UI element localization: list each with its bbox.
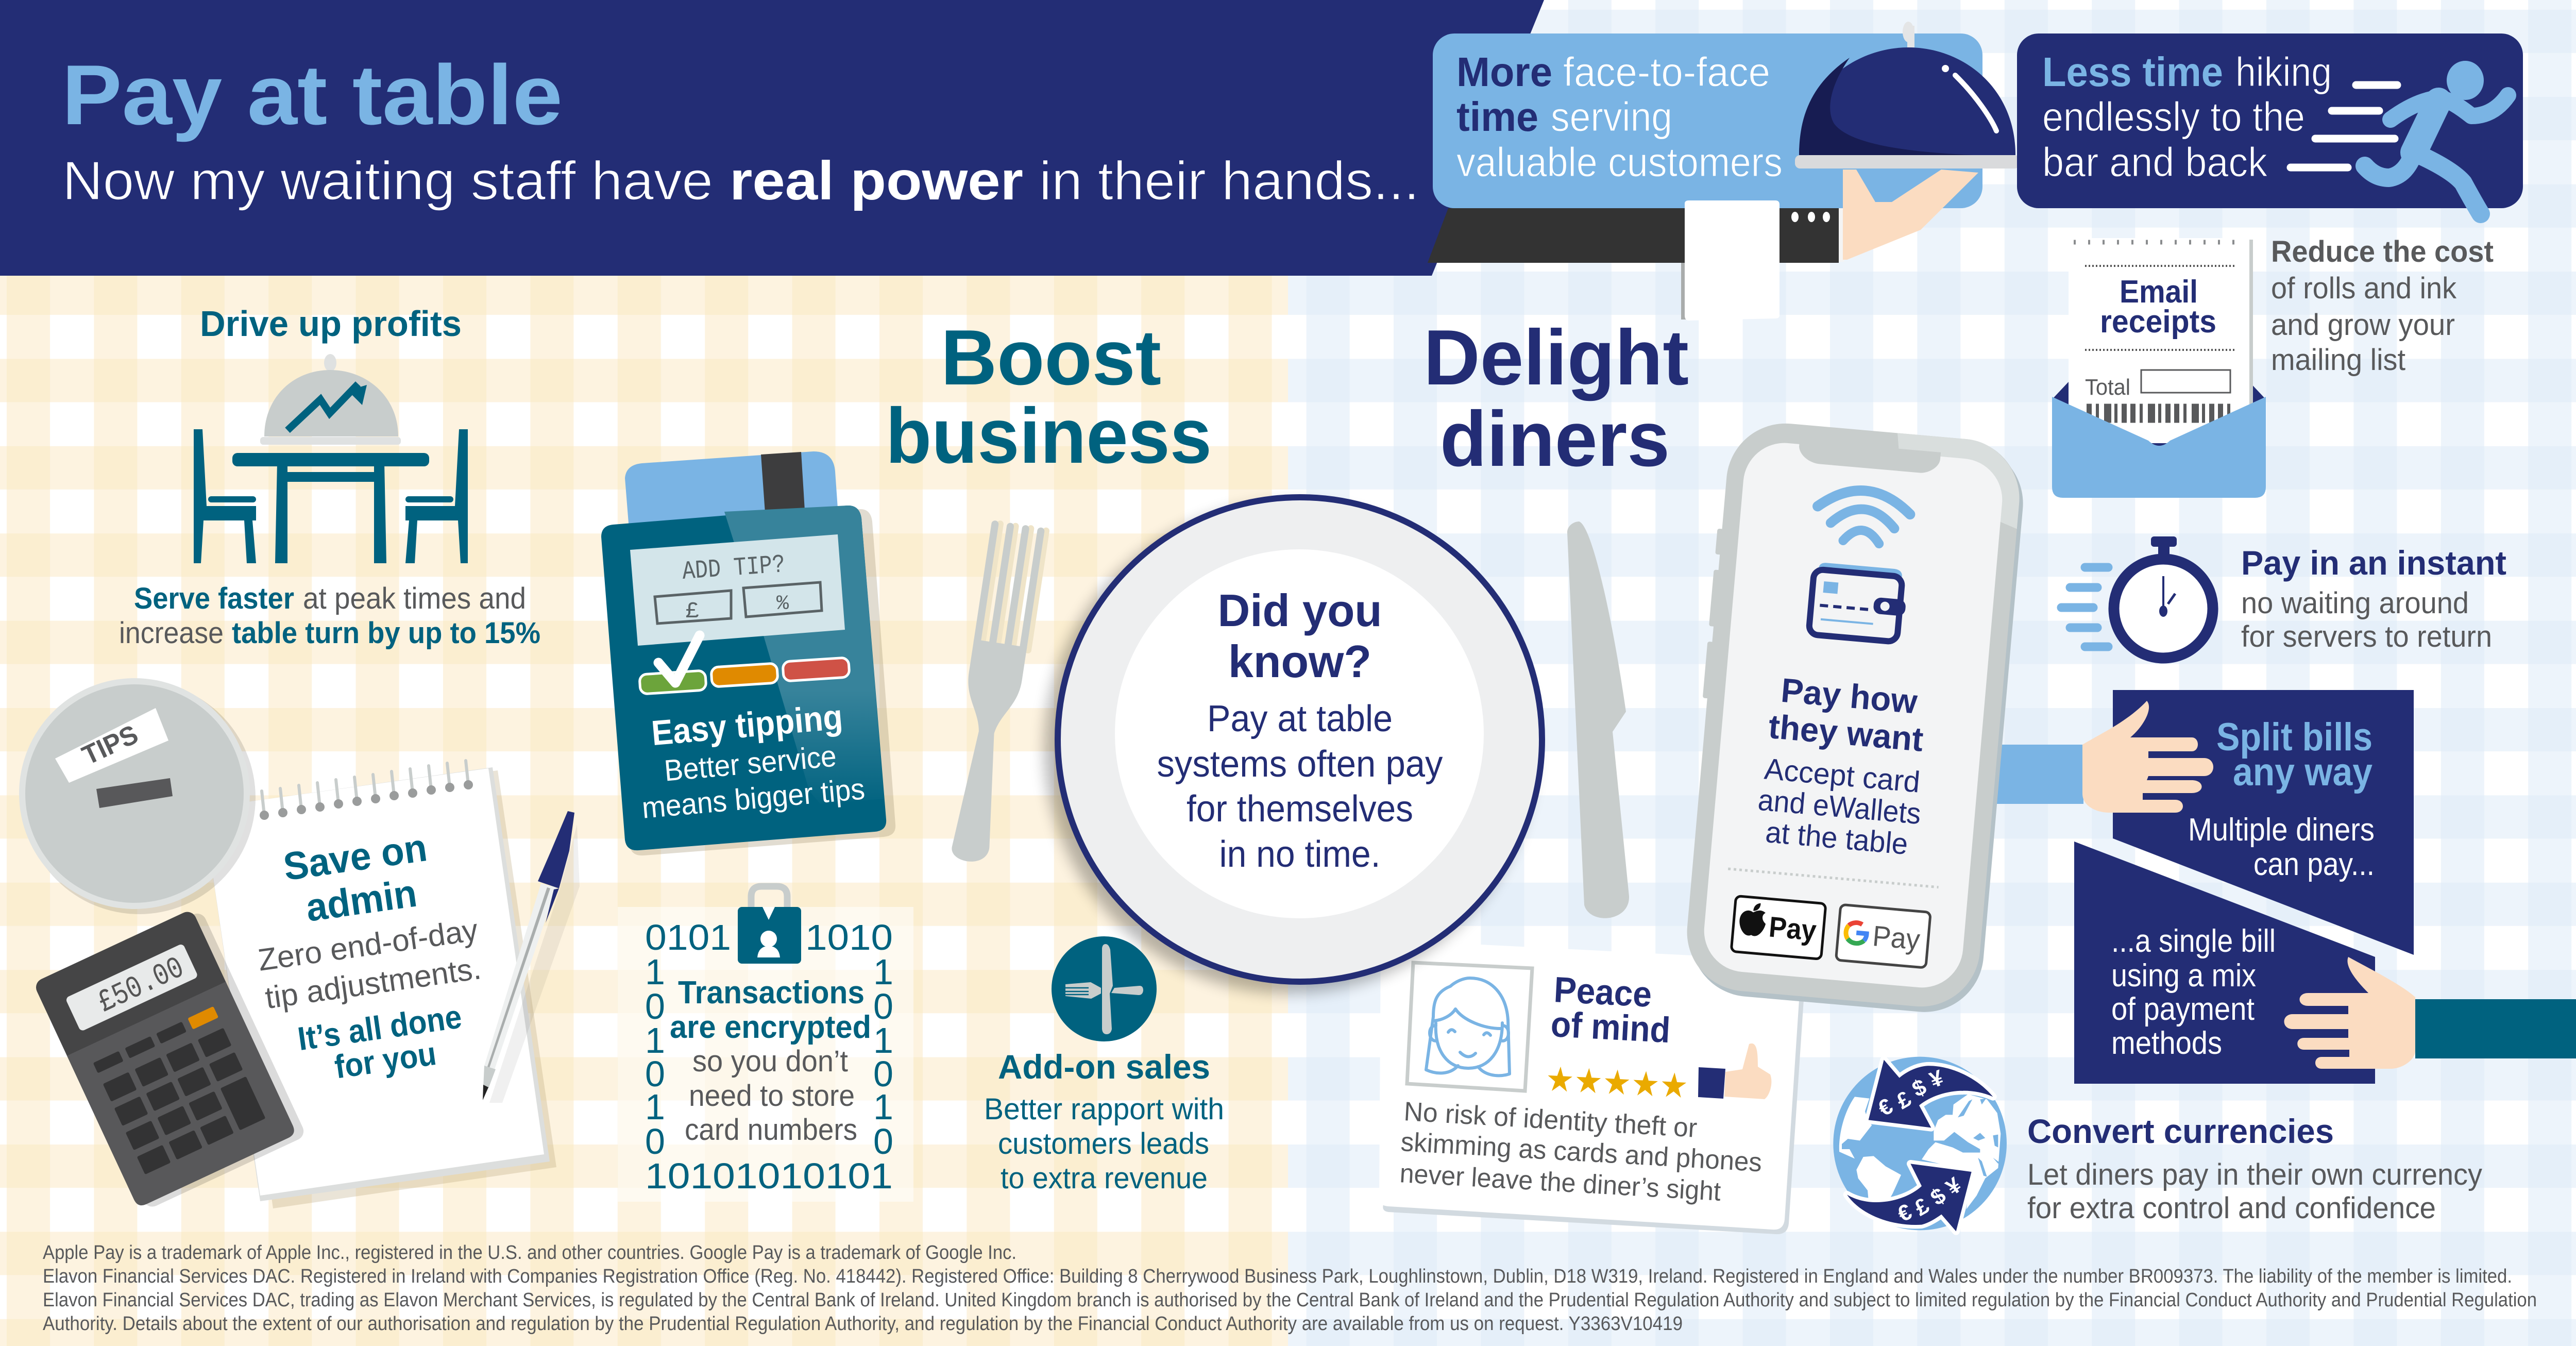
icon: knife: [1567, 521, 1629, 918]
panel: peace of mind card: [1379, 939, 1806, 1234]
panel: more face-to-face time: face-to-face: [1563, 49, 1770, 95]
title: Pay at table: [62, 47, 563, 142]
panel: less time hiking: bar and back: [2042, 139, 2268, 185]
icon: tips tin: [19, 678, 256, 914]
icon: globe with currency arrows: €: [1874, 1093, 1897, 1121]
icon: cutlery circle: [1052, 936, 1157, 1041]
footer legal text: [43, 1242, 2537, 1335]
panel: single bill mix of payment methods: [2074, 842, 2576, 1084]
panel: transactions encrypted: so you don’t: [692, 1045, 848, 1078]
panel: single bill mix of payment methods: ...a single bill: [2111, 923, 2276, 959]
icon: card terminal: Better service: [663, 739, 838, 788]
notepad: save on admin: It’s all done: [295, 998, 464, 1057]
text: serve faster: increase: [119, 616, 224, 650]
text: convert currencies: Let diners pay in their own currency: [2027, 1158, 2482, 1191]
heading: Delight diners: [1423, 314, 1689, 483]
heading: Delight diners: diners: [1440, 395, 1670, 483]
panel: transactions encrypted: 0: [645, 986, 665, 1027]
panel: split bills: [2082, 690, 2414, 955]
panel: transactions encrypted: card numbers: [685, 1113, 857, 1147]
panel: more face-to-face time: serving: [1551, 94, 1672, 140]
panel: single bill mix of payment methods: using a mix: [2111, 958, 2256, 994]
icon: email receipt in envelope: [2052, 238, 2266, 498]
text: serve faster: Serve faster: [134, 582, 294, 615]
panel: split bills: Split bills: [2216, 715, 2372, 759]
icon: table with cloche: [194, 354, 468, 563]
button: Google Pay: [1836, 904, 1930, 968]
notepad: save on admin: admin: [303, 871, 419, 930]
text: add-on sales: customers leads: [998, 1127, 1209, 1160]
icon: wallet: [1808, 562, 1909, 643]
notepad: save on admin: for you: [332, 1035, 438, 1086]
panel: transactions encrypted: 1: [645, 952, 665, 992]
text: serve faster: table turn by up to 15%: [232, 616, 540, 650]
panel: less time hiking: [2017, 33, 2523, 208]
footer legal text: Apple Pay is a trademark of Apple Inc., registered in the U.S. and other countries. Google Pay is a trademark of Google Inc.: [43, 1242, 1016, 1264]
panel: more face-to-face time: [1433, 33, 1982, 208]
icon: globe with currency arrows: $: [1908, 1074, 1930, 1102]
footer legal text: Authority. Details about the extent of our authorisation and regulation by the Prudential Regulation Authority, and regulation by the Financial Conduct Authority are available from us on request. Y3363V10419: [43, 1313, 1683, 1335]
icon: hand: [2082, 701, 2213, 813]
panel: transactions encrypted: 1: [873, 1087, 893, 1127]
icon: globe with currency arrows: £: [1910, 1193, 1934, 1221]
panel: more face-to-face time: valuable customers: [1456, 139, 1783, 185]
icon: calculator: £50.00: [93, 951, 190, 1021]
icon: globe with currency arrows: £: [1892, 1086, 1916, 1114]
icon: contactless waves: [1815, 487, 1912, 546]
panel: less time hiking: Less time: [2042, 49, 2223, 95]
panel: split bills: can pay...: [2253, 847, 2375, 882]
icon: globe with currency arrows: €: [1894, 1199, 1916, 1227]
notepad: save on admin: Zero end-of-day: [256, 913, 480, 978]
panel: split bills: any way: [2233, 750, 2372, 794]
text: reduce the cost: [2271, 235, 2494, 377]
phone: at the table: [1764, 815, 1909, 861]
panel: peace of mind card: skimming as cards and phones: [1400, 1127, 1762, 1177]
icon: arm and hand reaching right side: [2284, 957, 2576, 1069]
text: pay in an instant: [2241, 544, 2506, 653]
panel: transactions encrypted: 0: [645, 1121, 665, 1162]
heading: Boost business: business: [886, 392, 1212, 480]
panel: more face-to-face time: More: [1456, 49, 1552, 95]
icon: fork: [941, 523, 1046, 866]
icon: globe with currency arrows: ¥: [1942, 1173, 1966, 1200]
text: convert currencies: [2027, 1112, 2482, 1225]
icon: email receipt in envelope: Email: [2120, 274, 2198, 310]
panel: transactions encrypted: 1: [873, 952, 893, 992]
text: reduce the cost: Reduce the cost: [2271, 235, 2494, 268]
icon: tips tin: TIPS: [78, 719, 143, 771]
panel: transactions encrypted: 0: [873, 986, 893, 1027]
icon: globe with currency arrows: $: [1926, 1183, 1951, 1210]
panel: single bill mix of payment methods: methods: [2111, 1025, 2222, 1061]
icon: globe with currency arrows: [1833, 1057, 2007, 1231]
text: add-on sales: [984, 1048, 1224, 1195]
panel: transactions encrypted: 10101010101: [645, 1156, 893, 1196]
subtitle: Now my waiting staff have: [62, 150, 713, 211]
panel: peace of mind card: never leave the diner’s sight: [1399, 1158, 1722, 1207]
plate: did you know: [1044, 497, 1542, 994]
subtitle: in their hands...: [1039, 150, 1419, 211]
panel: less time hiking: endlessly to the: [2042, 94, 2305, 140]
panel: split bills: Multiple diners: [2188, 812, 2375, 848]
panel: transactions encrypted: 0: [873, 1054, 893, 1094]
icon: thumbs up: [1698, 1044, 1771, 1099]
panel: transactions encrypted: 1: [645, 1087, 665, 1127]
notepad: save on admin: [203, 761, 580, 1208]
icon: card terminal: means bigger tips: [640, 772, 866, 825]
panel: peace of mind card: Peace: [1553, 969, 1653, 1015]
button: Google Pay: Pay: [1871, 919, 1921, 956]
panel: peace of mind card: of mind: [1550, 1004, 1671, 1050]
phone: Pay how: [1780, 671, 1919, 721]
background: blue gingham: [1288, 0, 2576, 1346]
subtitle: real power: [730, 150, 1023, 211]
plate: did you know: systems often pay: [1157, 744, 1443, 785]
phone: [1677, 418, 2028, 1017]
panel: peace of mind card: No risk of identity theft or: [1403, 1097, 1698, 1143]
plate: did you know: Did you: [1218, 585, 1382, 636]
heading: Drive up profits: Drive up profits: [200, 304, 462, 344]
icon: padlock: [738, 886, 801, 964]
text: pay in an instant: no waiting around: [2241, 586, 2469, 620]
panel: transactions encrypted: 0: [645, 1054, 665, 1094]
icon: arm reaching left: [1991, 745, 2083, 804]
icon: running figure: [2291, 61, 2508, 214]
notepad: save on admin: Save on: [281, 826, 430, 889]
subtitle: [62, 150, 1419, 211]
phone: they want: [1767, 707, 1925, 759]
notepad: save on admin: tip adjustments.: [263, 951, 483, 1015]
panel: transactions encrypted: Transactions: [678, 975, 865, 1011]
icon: waiter arm with cloche: [1428, 22, 2020, 321]
icon: card terminal: Easy tipping: [650, 697, 844, 753]
plate: did you know: in no time.: [1219, 834, 1381, 875]
text: serve faster: at peak times and: [303, 582, 526, 615]
icon: calculator: [33, 905, 307, 1213]
panel: transactions encrypted: 1010: [805, 917, 893, 957]
panel: transactions encrypted: need to store: [689, 1079, 855, 1113]
background: cream gingham: [0, 0, 1288, 1346]
text: reduce the cost: and grow your: [2271, 308, 2455, 342]
text: serve faster: [119, 582, 540, 650]
spiral rings: [260, 761, 473, 820]
icon: email receipt in envelope: Total: [2085, 375, 2130, 400]
text: add-on sales: to extra revenue: [1001, 1162, 1208, 1195]
icon: stopwatch: [2061, 536, 2213, 658]
icon: smiling woman: [1426, 978, 1510, 1075]
icon: globe with currency arrows: ¥: [1926, 1066, 1946, 1093]
panel: transactions encrypted: 0101: [645, 917, 731, 957]
heading: Boost business: [886, 314, 1212, 480]
text: add-on sales: Add-on sales: [998, 1048, 1210, 1086]
icon: card terminal: £: [686, 599, 699, 625]
panel: transactions encrypted: 1: [645, 1020, 665, 1061]
panel: transactions encrypted: 0: [873, 1121, 893, 1162]
panel: transactions encrypted: [618, 886, 913, 1202]
heading: Boost business: Boost: [941, 314, 1161, 401]
text: reduce the cost: mailing list: [2271, 343, 2405, 377]
panel: single bill mix of payment methods: of payment: [2111, 991, 2255, 1027]
panel: transactions encrypted: 1: [873, 1020, 893, 1061]
button: Apple Pay: [1731, 896, 1826, 959]
plate: did you know: Pay at table: [1207, 698, 1393, 739]
text: pay in an instant: for servers to return: [2241, 620, 2492, 653]
panel: more face-to-face time: time: [1456, 94, 1538, 140]
text: add-on sales: Better rapport with: [984, 1092, 1224, 1126]
panel: transactions encrypted: are encrypted: [670, 1009, 871, 1045]
icon: pen: [483, 811, 580, 1103]
panel: peace of mind card: ★★★★★: [1545, 1059, 1689, 1106]
icon: card terminal: [601, 451, 895, 855]
heading: Delight diners: Delight: [1423, 314, 1689, 401]
header banner: [0, 0, 1544, 276]
phone: and eWallets: [1757, 783, 1922, 831]
plate: did you know: for themselves: [1187, 788, 1413, 830]
text: pay in an instant: Pay in an instant: [2241, 544, 2506, 582]
plate: did you know: know?: [1228, 636, 1371, 687]
text: convert currencies: Convert currencies: [2027, 1112, 2334, 1150]
button: Apple Pay: Pay: [1768, 910, 1818, 947]
icon: card terminal: ADD TIP?: [681, 550, 786, 587]
icon: email receipt in envelope: receipts: [2100, 304, 2216, 340]
text: reduce the cost: of rolls and ink: [2271, 272, 2457, 305]
phone: Accept card: [1763, 752, 1921, 799]
panel: less time hiking: hiking: [2235, 49, 2332, 95]
text: convert currencies: for extra control and confidence: [2027, 1191, 2436, 1225]
icon: card terminal: %: [776, 593, 789, 616]
